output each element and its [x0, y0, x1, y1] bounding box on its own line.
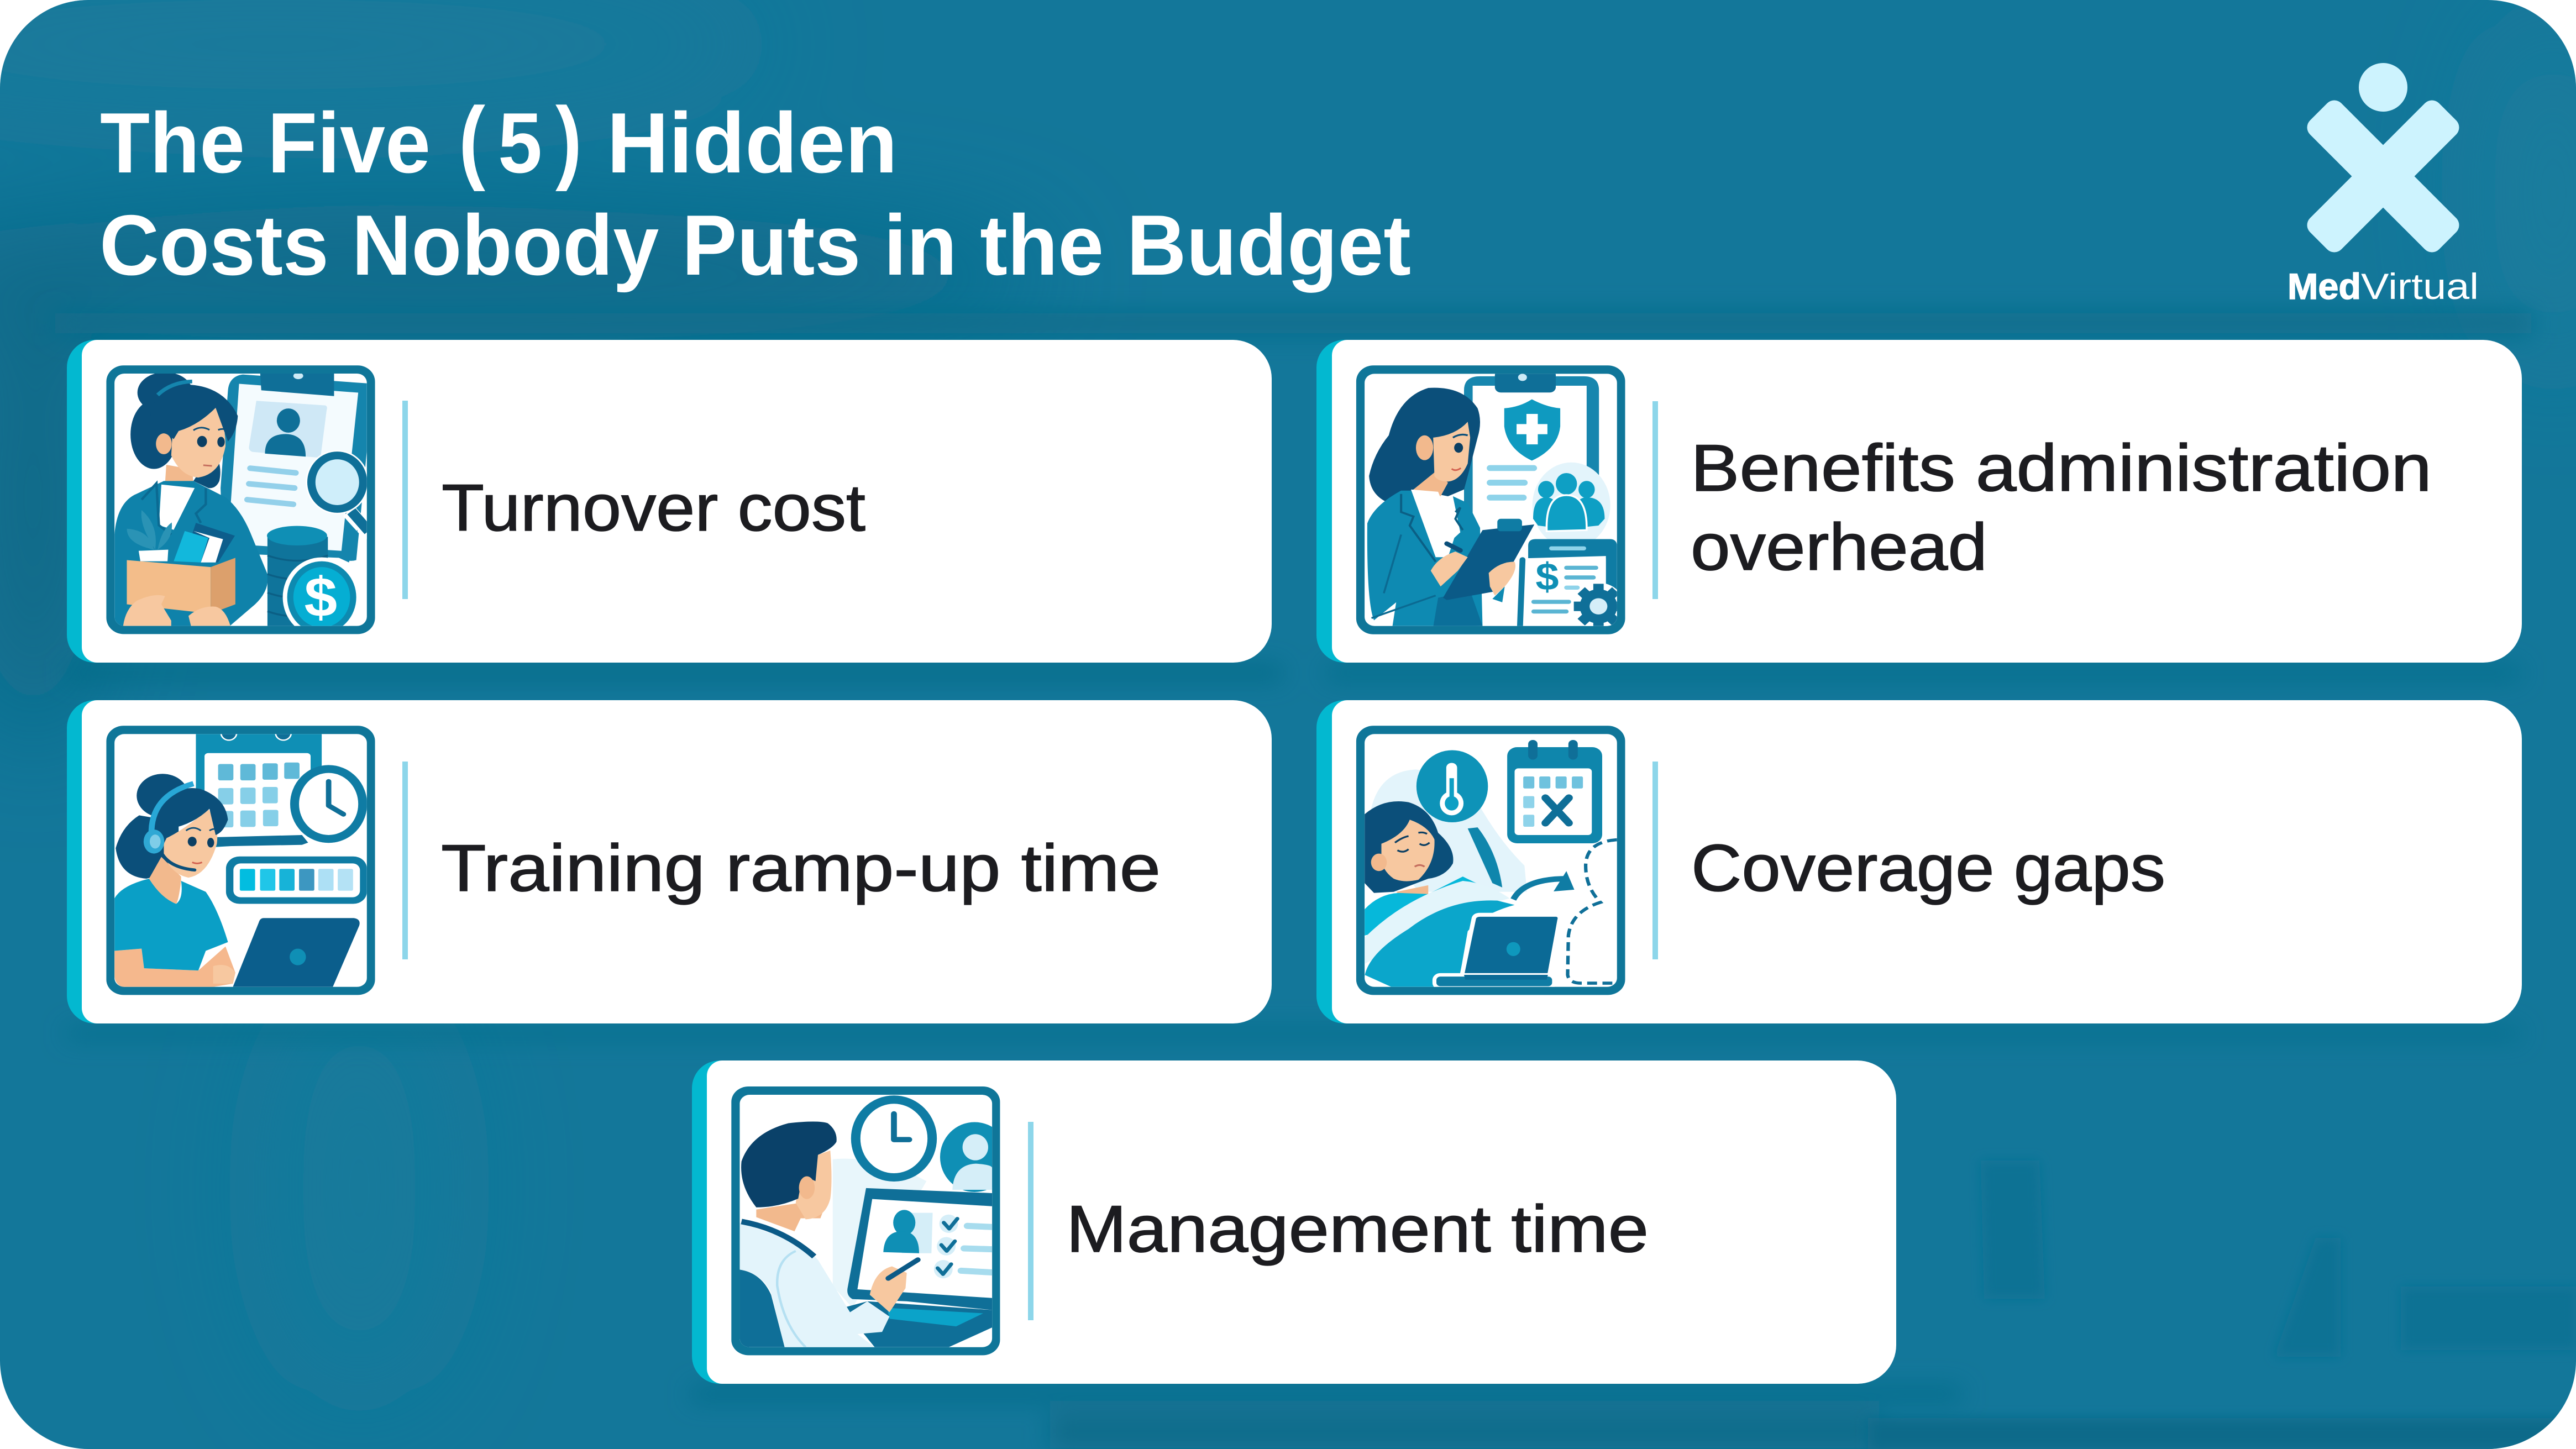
label: Benefits administration — [1691, 431, 2432, 505]
label: overhead — [1691, 510, 1987, 584]
logo: MedVirtual: Virtual — [2361, 266, 2479, 307]
label: Coverage gaps — [1691, 831, 2165, 905]
divider — [402, 762, 408, 959]
divider — [1028, 1122, 1033, 1320]
panel: training ramp-up time — [67, 700, 1272, 1023]
icon: sick employee in bed with calendar — [1356, 726, 1625, 995]
label: Turnover cost — [442, 471, 865, 545]
label — [1691, 431, 2432, 584]
icon: woman with clipboard, shield and team: $ — [1535, 555, 1559, 599]
icon: woman with clipboard, shield and team — [1356, 365, 1625, 634]
divider — [402, 401, 408, 599]
title: ) — [555, 88, 582, 192]
icon: employee leaving with box and coins: $ — [305, 566, 337, 629]
title — [99, 88, 1411, 293]
logo: MedVirtual — [2288, 63, 2479, 307]
icon: manager at monitor with checklist — [731, 1086, 1009, 1355]
title: Hidden — [607, 95, 898, 191]
title: The Five — [100, 95, 431, 191]
panel: turnover cost — [67, 340, 1272, 663]
divider — [1652, 401, 1658, 599]
icon: trainee with headset, calendar and progress bar — [106, 726, 375, 995]
logo: MedVirtual: Med — [2288, 266, 2361, 307]
icon: employee leaving with box and coins — [106, 365, 375, 637]
divider — [1652, 762, 1658, 959]
title: ( — [459, 88, 485, 192]
title: Costs Nobody Puts in the Budget — [99, 197, 1411, 293]
panel: coverage gaps — [1316, 700, 2522, 1023]
title: 5 — [498, 95, 542, 191]
label: Training ramp-up time — [441, 831, 1161, 905]
panel: benefits administration overhead — [1316, 340, 2522, 663]
panel: management time — [692, 1060, 1896, 1384]
label: Management time — [1066, 1192, 1649, 1266]
